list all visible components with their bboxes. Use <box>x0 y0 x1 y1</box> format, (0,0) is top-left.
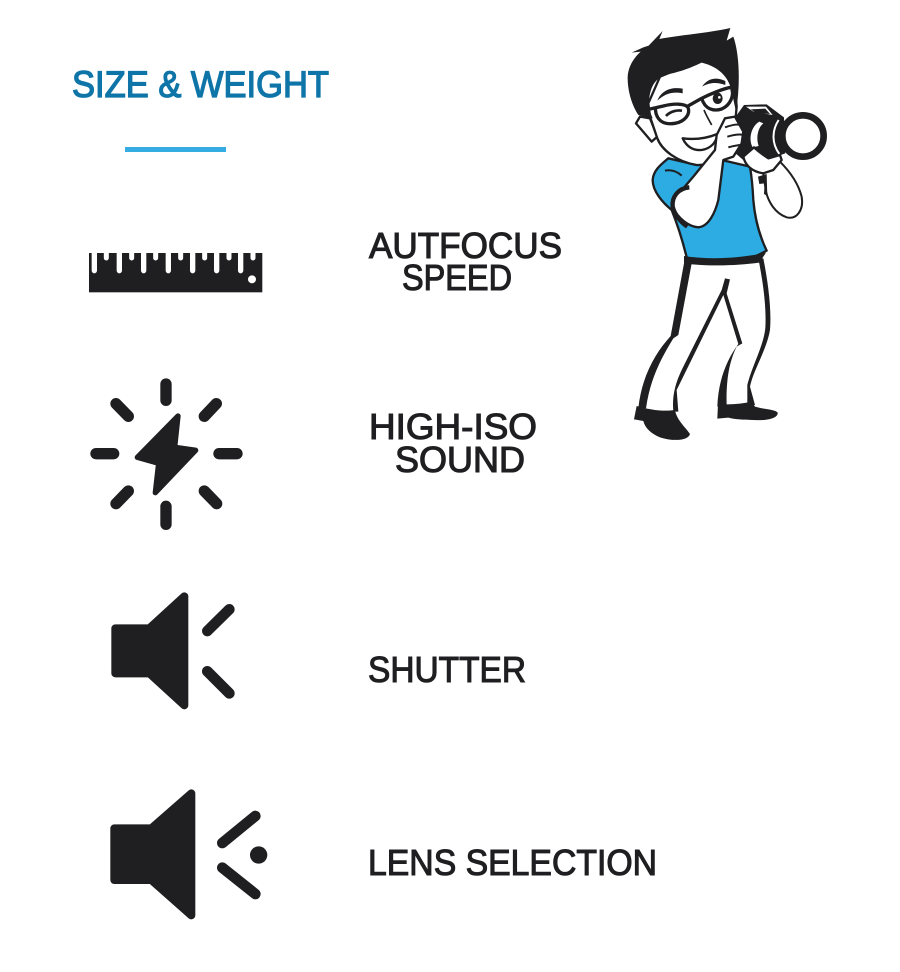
label: autofocus speed: AUTFOCUS <box>369 225 562 266</box>
winking eye <box>666 110 682 116</box>
label: lens selection: LENS SELECTION <box>368 842 657 883</box>
label: high-iso sound <box>369 406 537 480</box>
far arm <box>763 162 802 218</box>
title: SIZE & WEIGHT <box>72 64 329 105</box>
icon: speaker low <box>115 596 229 705</box>
icon: ruler <box>89 250 262 292</box>
label: autofocus speed <box>369 225 562 298</box>
illustration: photographer <box>628 28 824 440</box>
mouth <box>683 134 717 150</box>
icon: flash burst <box>96 384 237 524</box>
glasses <box>650 87 732 124</box>
lens <box>773 120 779 154</box>
ear <box>636 117 657 142</box>
nose <box>704 110 712 125</box>
label: high-iso sound: SOUND <box>395 439 525 480</box>
face <box>648 60 737 165</box>
upper body and head <box>628 28 824 227</box>
title underline <box>125 147 226 152</box>
label: high-iso sound: HIGH-ISO <box>369 406 537 447</box>
open eye <box>713 93 723 104</box>
sleeve band <box>673 187 689 227</box>
camera body <box>732 104 785 160</box>
finger lines <box>725 125 743 147</box>
supporting hand <box>743 147 782 173</box>
legs <box>634 253 778 440</box>
hair <box>628 28 739 118</box>
label: autofocus speed: SPEED <box>402 257 512 298</box>
icon: speaker with dot <box>114 793 267 915</box>
label: shutter: SHUTTER <box>368 649 526 690</box>
shirt <box>653 158 767 260</box>
eyebrows <box>657 88 683 101</box>
near arm <box>673 117 743 227</box>
